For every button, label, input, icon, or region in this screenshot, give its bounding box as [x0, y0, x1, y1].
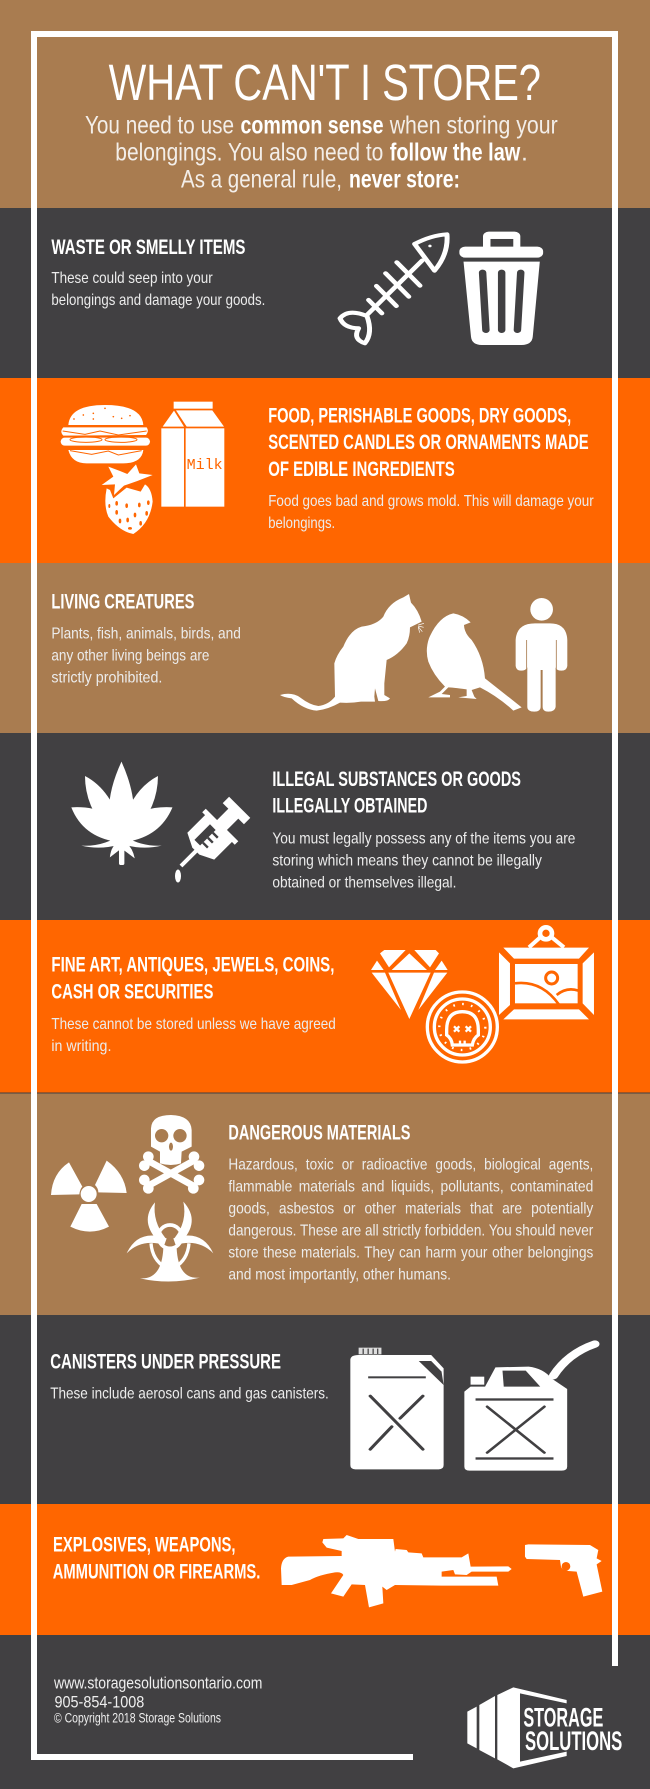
- icon: bird: [427, 613, 522, 711]
- body: illegal substances: You must legally possess any of the items you are: [272, 830, 575, 848]
- panel: fine art: [0, 920, 650, 1094]
- icon: strawberry: [102, 464, 153, 534]
- phone number: 905-854-1008: [54, 1692, 144, 1712]
- body: food: Food goes bad and grows mold. This will damage your: [268, 493, 594, 510]
- panel: header: [0, 0, 650, 208]
- body: dangerous materials: and most importantly, other humans.: [228, 1266, 451, 1284]
- icon: milk carton: Milk: [187, 457, 223, 474]
- panel: waste or smelly items: [0, 208, 650, 378]
- icon: radiation: [51, 1161, 127, 1232]
- intro text: never store:: [349, 166, 460, 194]
- panel: illegal substances: [0, 733, 650, 920]
- website: www.storagesolutionsontario.com: [53, 1674, 262, 1692]
- heading: illegal substances: ILLEGALLY OBTAINED: [272, 794, 427, 818]
- body: living creatures: any other living beings are: [51, 648, 209, 664]
- body: dangerous materials: [228, 1156, 594, 1284]
- icon: milk carton: [161, 402, 224, 507]
- body: dangerous materials: dangerous. These are all strictly forbidden. You should never: [228, 1222, 594, 1240]
- body: dangerous materials: Hazardous, toxic or radioactive goods, biological agents,: [228, 1156, 593, 1174]
- body: living creatures: [51, 626, 241, 686]
- panel: food: [0, 378, 650, 563]
- heading: living creatures: LIVING CREATURES: [51, 590, 194, 614]
- logo: storage solutions: [467, 1687, 622, 1768]
- icon: jerry can left: [350, 1348, 444, 1469]
- body: fine art: These cannot be stored unless we have agreed: [51, 1016, 336, 1033]
- panel: canisters: [0, 1315, 650, 1504]
- intro text: You need to use: [85, 112, 234, 140]
- body: waste: These could seep into your: [51, 270, 213, 287]
- heading: fine art: [51, 953, 334, 1004]
- icon: trash can: [459, 232, 543, 345]
- body: illegal substances: storing which means they cannot be illegally: [272, 852, 542, 870]
- body: living creatures: strictly prohibited.: [51, 670, 162, 686]
- title: WHAT CAN'T I STORE?: [109, 54, 541, 111]
- body: dangerous materials: goods, asbestos or other materials that are potentially: [228, 1200, 593, 1218]
- icon: cannabis leaf: [71, 762, 172, 865]
- intro text: follow the law: [390, 138, 521, 166]
- body: food: belongings.: [268, 515, 335, 532]
- icon: person: [516, 598, 567, 712]
- heading: explosives: [53, 1533, 260, 1583]
- icon: skull and crossbones: [139, 1115, 204, 1194]
- intro text: belongings. You also need to: [115, 138, 383, 166]
- body: illegal substances: [272, 830, 575, 892]
- body: fine art: [51, 1016, 336, 1055]
- heading: explosives: EXPLOSIVES, WEAPONS,: [53, 1533, 236, 1557]
- icon: diamond: [371, 950, 448, 1019]
- body: illegal substances: obtained or themselves illegal.: [272, 874, 456, 892]
- heading: explosives: AMMUNITION OR FIREARMS.: [53, 1559, 260, 1583]
- intro text: .: [521, 138, 528, 166]
- heading: food: [268, 404, 589, 481]
- icon: syringe: [165, 791, 256, 882]
- icon: cat: [280, 594, 424, 711]
- heading: canisters: CANISTERS UNDER PRESSURE: [50, 1350, 281, 1374]
- heading: fine art: FINE ART, ANTIQUES, JEWELS, COINS,: [51, 953, 334, 977]
- panel: dangerous materials: [0, 1094, 650, 1315]
- icon: burger: [61, 405, 150, 463]
- body: waste: belongings and damage your goods.: [51, 292, 265, 309]
- icon: fish bones: [340, 234, 447, 343]
- icon: picture frame: [499, 927, 594, 1019]
- panel: footer: [0, 1635, 650, 1789]
- body: dangerous materials: flammable materials and liquids, pollutants, contaminated: [228, 1178, 593, 1196]
- panel: living creatures: [0, 563, 650, 733]
- heading: dangerous materials: DANGEROUS MATERIALS: [228, 1120, 410, 1144]
- icon: rifle: [281, 1535, 512, 1607]
- body: food: [268, 493, 594, 532]
- intro text: common sense: [240, 112, 384, 140]
- heading: food: OF EDIBLE INGREDIENTS: [268, 457, 455, 481]
- intro text: As a general rule,: [181, 166, 342, 194]
- body: waste: [51, 270, 265, 309]
- body: fine art: in writing.: [51, 1038, 111, 1055]
- heading: waste: WASTE OR SMELLY ITEMS: [51, 235, 245, 259]
- body: canisters: These include aerosol cans and gas canisters.: [50, 1386, 329, 1402]
- heading: illegal substances: [272, 767, 521, 818]
- icon: biohazard: [127, 1202, 213, 1281]
- heading: fine art: CASH OR SECURITIES: [51, 980, 213, 1004]
- copyright: © Copyright 2018 Storage Solutions: [54, 1710, 221, 1726]
- body: living creatures: Plants, fish, animals, birds, and: [51, 626, 241, 642]
- intro text: when storing your: [389, 112, 558, 140]
- icon: skull coin: [427, 992, 497, 1062]
- icon: pistol: [525, 1544, 602, 1597]
- intro text: [85, 112, 558, 194]
- body: dangerous materials: store these materials. They can harm your other belongings: [228, 1244, 593, 1262]
- heading: illegal substances: ILLEGAL SUBSTANCES OR GOODS: [272, 767, 521, 791]
- panel: explosives: [0, 1504, 650, 1635]
- icon: jerry can with spout: [464, 1344, 595, 1471]
